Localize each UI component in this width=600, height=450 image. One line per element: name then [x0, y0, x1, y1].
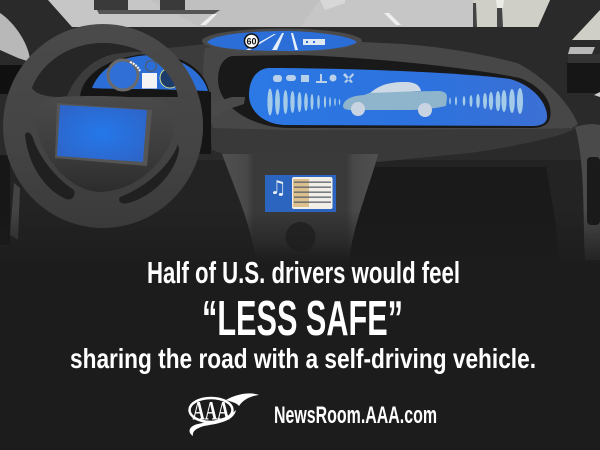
car — [343, 82, 447, 117]
right vent — [575, 124, 600, 260]
speed sign — [244, 34, 258, 48]
website: NewsRoom.AAA.com — [274, 402, 437, 429]
upper display housing — [202, 28, 362, 54]
wheel rim — [3, 24, 203, 228]
left upper opening — [32, 43, 143, 97]
main display housing — [218, 55, 551, 128]
left lower dark — [0, 155, 10, 245]
music note: ♫ — [269, 177, 287, 199]
windshield and road — [48, 0, 550, 27]
stalk — [212, 97, 245, 118]
infotainment screen — [265, 175, 336, 212]
lower interior — [0, 160, 600, 270]
dashboard top — [0, 0, 600, 170]
dashboard gray rim — [203, 42, 578, 158]
headline line 2: “LESS SAFE” — [202, 292, 403, 346]
cluster housing — [80, 54, 210, 97]
speed sign: 60 — [246, 36, 257, 46]
center console — [222, 154, 378, 268]
left dark door panel — [0, 65, 24, 94]
headline line 1: Half of U.S. drivers would feel — [147, 255, 460, 290]
side window left — [0, 13, 30, 62]
AAA logo: AAA — [192, 396, 230, 426]
lower dash band — [210, 128, 574, 163]
knob — [286, 222, 316, 252]
footwell right — [340, 167, 560, 270]
sensor waves left — [267, 88, 340, 116]
steering wheel — [3, 24, 203, 228]
upper display — [207, 31, 357, 51]
hub screen bezel — [55, 103, 152, 166]
side window right — [567, 10, 600, 97]
hub opening right — [119, 144, 179, 204]
hub opening left — [25, 132, 75, 199]
wheel hub — [35, 96, 173, 192]
vehicle ahead right — [473, 0, 550, 27]
main display — [249, 68, 547, 126]
instrument cluster — [92, 55, 208, 91]
sensor waves right — [449, 88, 523, 114]
bottom fade — [0, 210, 600, 270]
hood gray over cluster — [60, 44, 240, 128]
column behind wheel — [196, 92, 211, 154]
vehicle ahead left — [94, 0, 220, 14]
left door strip — [10, 183, 20, 240]
hub screen — [57, 105, 147, 162]
status icons — [273, 73, 354, 83]
AAA logo — [190, 393, 259, 436]
